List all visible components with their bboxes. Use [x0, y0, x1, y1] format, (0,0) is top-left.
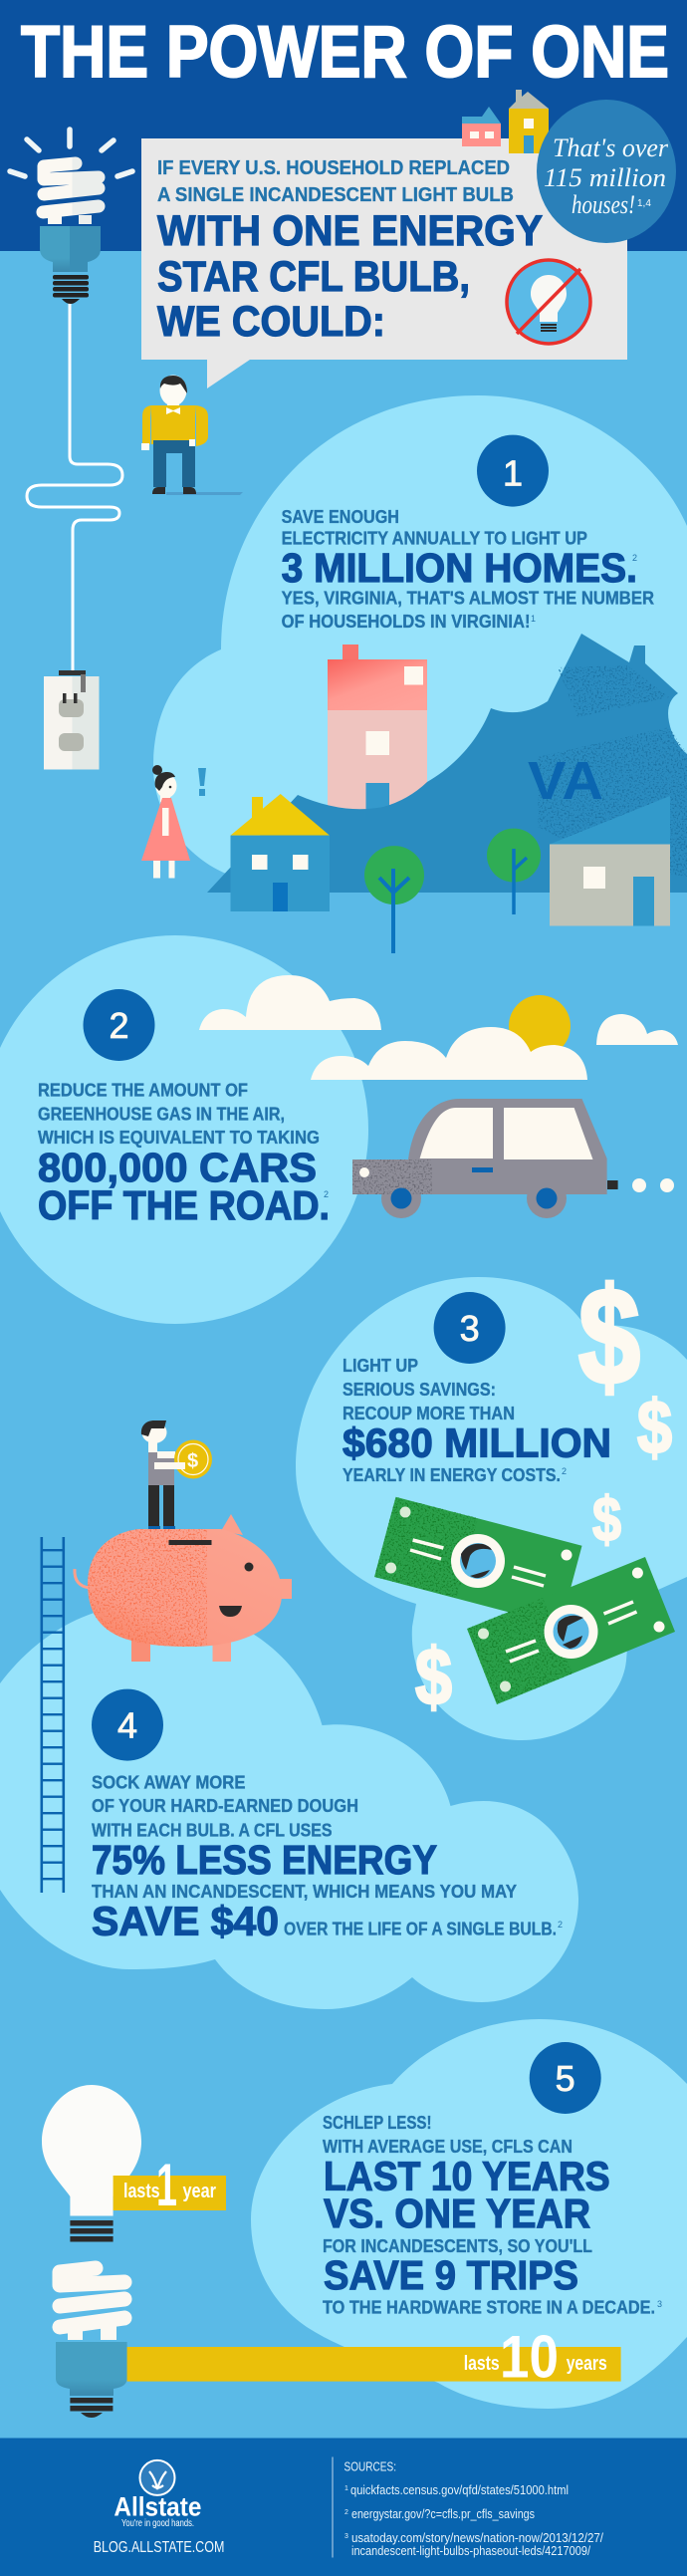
step 5 number [530, 2042, 601, 2114]
Allstate logo: Allstate [114, 2492, 201, 2522]
house: yellow small [509, 90, 549, 153]
cloud 1 backdrop [153, 395, 687, 877]
step 2 text: 800,000 CARS [38, 1145, 317, 1190]
step 2 number: 2 [109, 1005, 129, 1046]
step 5 text: VS. ONE YEAR [324, 2190, 590, 2236]
step 1 text: YES, VIRGINIA, THAT'S ALMOST THE NUMBER [282, 588, 654, 608]
step 2 text: 2 [324, 1189, 329, 1199]
step 2 number [84, 989, 155, 1061]
intro text: WE COULD: [157, 298, 385, 346]
Allstate logo: You're in good hands. [121, 2517, 194, 2529]
sources: usatoday.com/story/news/nation-now/2013/12/27/ [351, 2530, 603, 2545]
step 4 text [92, 1773, 563, 1944]
sources [344, 2458, 603, 2558]
step 5 text: WITH AVERAGE USE, CFLS CAN [323, 2137, 572, 2157]
speech bubble [141, 138, 627, 388]
bar: lasts 10 years: lasts [464, 2353, 500, 2375]
step 2 text: REDUCE THE AMOUNT OF [38, 1081, 248, 1101]
cloud white right [596, 1014, 678, 1045]
person with coin [141, 1420, 212, 1529]
CFL bulb lower [56, 2268, 127, 2418]
banknote 1 [374, 1497, 581, 1626]
step 1 text: OF HOUSEHOLDS IN VIRGINIA! [282, 612, 530, 632]
step 2 text: OFF THE ROAD. [38, 1182, 330, 1228]
icon: dollar signs: $ [578, 1260, 640, 1414]
ladder [40, 1537, 65, 1893]
step 3 text: YEARLY IN ENERGY COSTS. [343, 1465, 561, 1485]
bar: lasts 1 year [114, 2152, 226, 2218]
step 4 text: WITH EACH BULB. A CFL USES [92, 1821, 333, 1841]
sources: 3 [344, 2533, 348, 2540]
bar: lasts 1 year: year [183, 2181, 216, 2202]
grey house [550, 796, 670, 926]
man in yellow shirt [141, 375, 243, 495]
Allstate logo [114, 2460, 201, 2529]
intro text: A SINGLE INCANDESCENT LIGHT BULB [157, 183, 514, 206]
sources: quickfacts.census.gov/qfd/states/51000.html [350, 2482, 569, 2497]
bar: lasts 1 year: lasts [123, 2181, 160, 2202]
house: pink small [462, 107, 501, 146]
blue house [231, 794, 330, 911]
intro text [157, 156, 543, 346]
piggy bank [75, 1514, 292, 1662]
sources: 2 [344, 2509, 348, 2516]
car [352, 1099, 674, 1218]
step 5 text: SCHLEP LESS! [323, 2113, 432, 2133]
icon: dollar signs [415, 1260, 672, 1722]
cloud 4 backdrop [0, 1604, 578, 2009]
Virginia state shape [207, 634, 687, 893]
step 3 text: LIGHT UP [343, 1356, 418, 1376]
cloud 5 backdrop [251, 2019, 687, 2409]
cloud 2 backdrop [0, 935, 368, 1324]
step 1 text: 3 MILLION HOMES. [282, 545, 637, 591]
callout: over 115 million houses: That's over [553, 133, 669, 162]
icon: dollar signs: $ [637, 1386, 672, 1470]
callout: over 115 million houses: houses! [572, 190, 635, 219]
step 1 text: 2 [632, 553, 637, 563]
icon: no incandescent bulb [507, 260, 590, 344]
header band [0, 0, 687, 251]
step 5 text: SAVE 9 TRIPS [324, 2252, 578, 2298]
step 3 text: RECOUP MORE THAN [343, 1404, 515, 1423]
step 5 text: LAST 10 YEARS [324, 2153, 610, 2198]
step 1 text: ELECTRICITY ANNUALLY TO LIGHT UP [282, 528, 587, 548]
step 1 number: 1 [503, 452, 523, 494]
step 3 text: $680 MILLION [343, 1420, 611, 1466]
bar: lasts 10 years: 10 [500, 2323, 559, 2391]
icon: dollar signs: $ [415, 1633, 452, 1722]
intro text: IF EVERY U.S. HOUSEHOLD REPLACED [157, 156, 510, 179]
step 1 text: SAVE ENOUGH [282, 507, 399, 527]
tree 2 [487, 829, 541, 914]
cloud white left [199, 975, 381, 1030]
callout: over 115 million houses: 115 million [544, 163, 666, 192]
step 3 number: 3 [460, 1308, 480, 1349]
step 3 text [343, 1356, 611, 1485]
footer band [0, 2439, 687, 2576]
step 4 number: 4 [117, 1705, 137, 1746]
step 2 text: GREENHOUSE GAS IN THE AIR, [38, 1104, 285, 1124]
step 2 text: WHICH IS EQUIVALENT TO TAKING [38, 1128, 320, 1148]
sources: incandescent-light-bulbs-phaseout-leds/4217009/ [351, 2543, 590, 2558]
step 4 text: THAN AN INCANDESCENT, WHICH MEANS YOU MAY [92, 1882, 517, 1902]
step 4 text: 2 [558, 1920, 563, 1930]
bar: lasts 10 years [127, 2323, 621, 2391]
step 3 text: 2 [562, 1466, 567, 1476]
sun [509, 995, 571, 1057]
callout: over 115 million houses: 1,4 [637, 198, 651, 209]
step 5 text: FOR INCANDESCENTS, SO YOU'LL [323, 2236, 592, 2256]
icon: CFL bulb with cord [27, 163, 122, 672]
step 4 text: OVER THE LIFE OF A SINGLE BULB. [284, 1920, 557, 1939]
blog url: BLOG.ALLSTATE.COM [94, 2539, 224, 2556]
step 4 number [92, 1689, 163, 1761]
incandescent bulb [42, 2085, 141, 2241]
icon: wall outlet with plug [44, 670, 100, 769]
icon: dollar signs: $ [592, 1485, 621, 1555]
cloud 3 backdrop [296, 1277, 687, 1740]
sources: SOURCES: [344, 2458, 396, 2474]
step 5 text: TO THE HARDWARE STORE IN A DECADE. [323, 2298, 655, 2318]
bar: lasts 1 year: 1 [156, 2152, 177, 2218]
intro text: STAR CFL BULB, [157, 253, 470, 301]
step 5 text: 3 [657, 2299, 662, 2309]
step 2 text [38, 1081, 330, 1228]
step 3 number [434, 1292, 506, 1364]
cloud white centre [311, 1027, 587, 1080]
sources: energystar.gov/?c=cfls.pr_cfls_savings [351, 2506, 535, 2521]
sources: 1 [344, 2485, 348, 2492]
woman with exclamation [141, 765, 206, 879]
bar: lasts 10 years: years [567, 2353, 607, 2375]
callout: over 115 million houses [537, 100, 676, 243]
step 3 text: SERIOUS SAVINGS: [343, 1380, 496, 1400]
pink tall house [328, 644, 427, 810]
step 5 number: 5 [556, 2058, 575, 2099]
person with coin: $ [187, 1450, 198, 1472]
step 5 text [323, 2113, 662, 2318]
step 4 text: SOCK AWAY MORE [92, 1773, 245, 1793]
step 1 text [282, 507, 654, 632]
step 1 number [477, 435, 549, 507]
step 4 text: SAVE $40 [92, 1899, 279, 1944]
step 4 text: 75% LESS ENERGY [92, 1837, 437, 1883]
banknote 2 [467, 1557, 675, 1704]
tree 1 [364, 846, 424, 953]
intro text: WITH ONE ENERGY [157, 207, 543, 255]
step 4 text: OF YOUR HARD-EARNED DOUGH [92, 1796, 358, 1816]
icon: light rays [10, 129, 132, 176]
step 1 text: 1 [531, 614, 536, 624]
VA label: VA [528, 751, 603, 811]
